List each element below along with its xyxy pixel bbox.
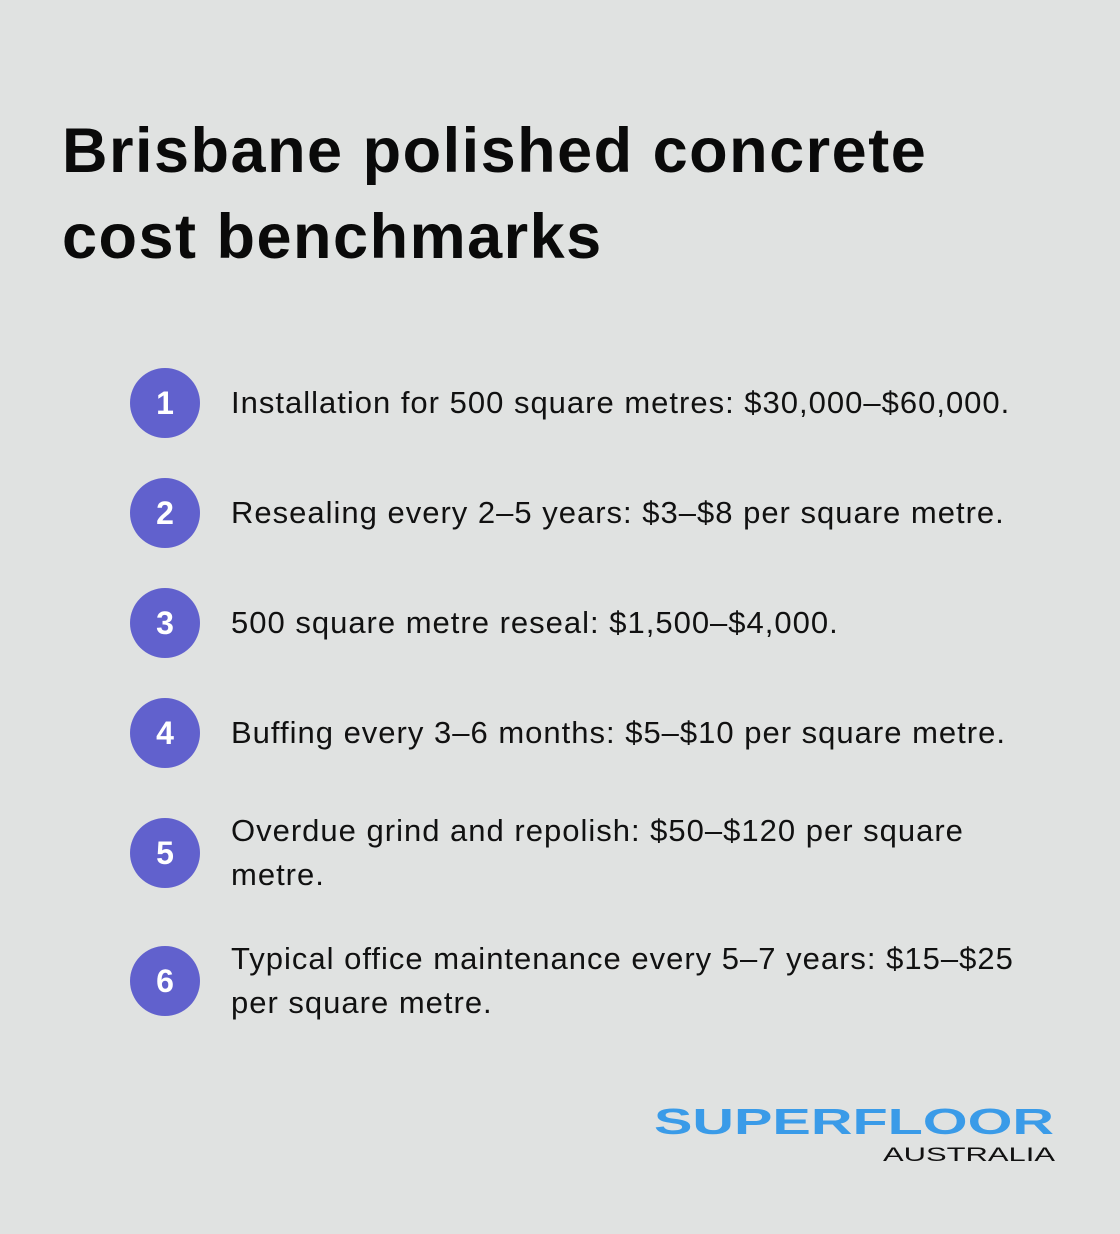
item 5: metre. [231,857,325,892]
item 4: Buffing every 3–6 months: $5–$10 per square metre. [231,715,1006,750]
item 3 [130,588,839,658]
item 5: 5 [156,835,174,871]
title: cost benchmarks [62,202,603,272]
item 3: 500 square metre reseal: $1,500–$4,000. [231,605,839,640]
item 2: Resealing every 2–5 years: $3–$8 per square metre. [231,495,1005,530]
logo: SUPERFLOOR [654,1101,1054,1142]
item 1: 1 [156,385,174,421]
item 5: Overdue grind and repolish: $50–$120 per square [231,813,964,848]
item 4 [130,698,1006,768]
item 2: 2 [156,495,174,531]
item 1: Installation for 500 square metres: $30,000–$60,000. [231,385,1010,420]
item 5 [130,813,964,892]
item 2 [130,478,1005,548]
item 3: 3 [156,605,174,641]
item 6: Typical office maintenance every 5–7 years: $15–$25 [231,941,1014,976]
item 1 [130,368,1010,438]
logo [654,1101,1056,1166]
title: Brisbane polished concrete [62,116,927,186]
item 6 [130,941,1014,1020]
item 4: 4 [156,715,174,751]
logo: AUSTRALIA [883,1145,1056,1166]
item 6: per square metre. [231,985,493,1020]
item 6: 6 [156,963,174,999]
title [62,116,927,272]
